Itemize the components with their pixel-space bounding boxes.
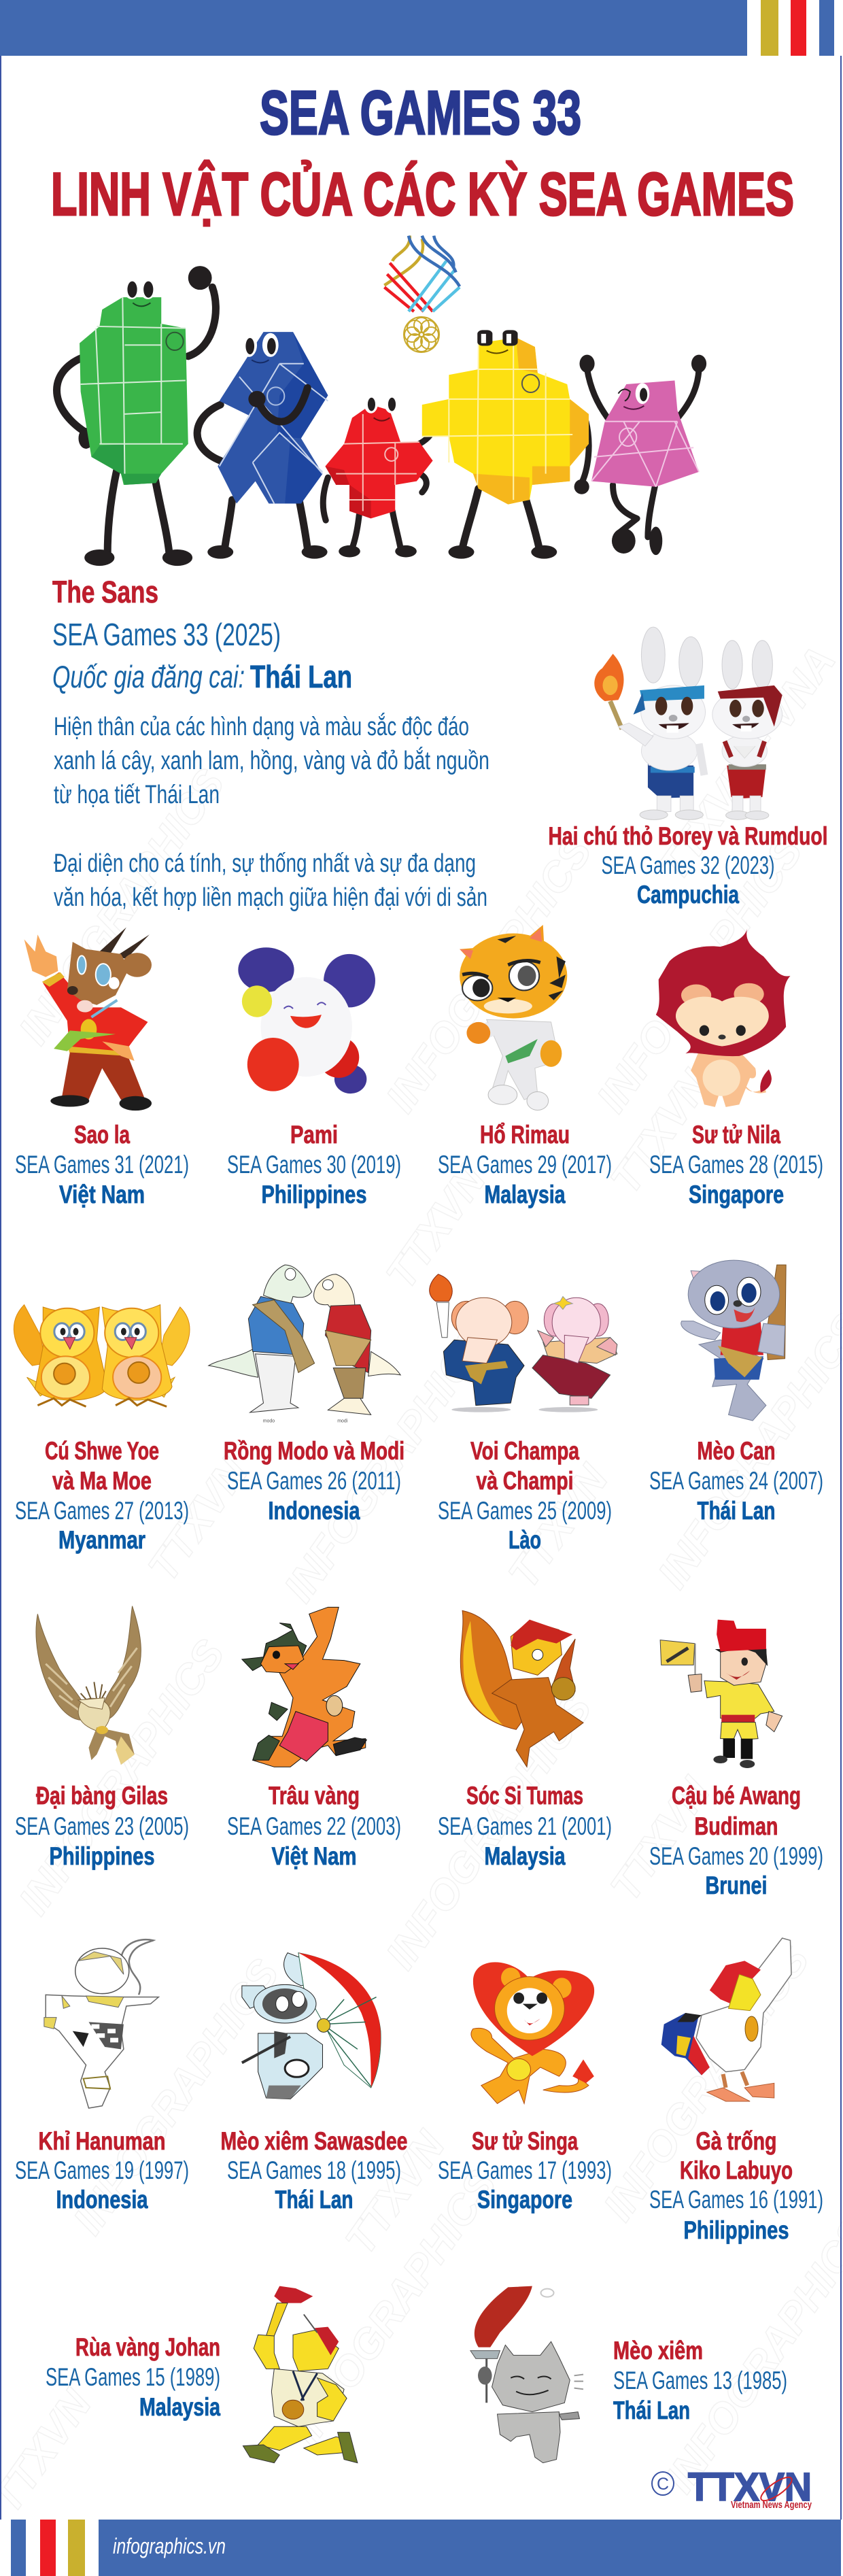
icon: Modo and Modi: modi	[337, 1419, 348, 1423]
icon: squirrel	[460, 1610, 583, 1767]
text: TTXVN	[602, 1769, 720, 1910]
icon: Hổ Rimau	[460, 925, 567, 1110]
host: Philippines	[49, 1842, 155, 1870]
icon: Sư tử Nila	[656, 928, 790, 1107]
text: INFOGRAPHICS	[377, 1686, 601, 1978]
text: TTXVN	[139, 1449, 258, 1590]
host: Singapore	[477, 2186, 572, 2214]
icon: yellow mascot	[422, 330, 589, 559]
name: Pami	[290, 1121, 338, 1149]
name: Khỉ Hanuman	[38, 2127, 166, 2155]
edition: SEA Games 18 (1995)	[227, 2156, 401, 2184]
host: Thái Lan	[275, 2186, 354, 2214]
edition: SEA Games 23 (2005)	[15, 1812, 189, 1840]
text: TTXVN – VNA	[649, 638, 843, 889]
paragraph: description: xanh lá cây, xanh lam, hồng, vàng và đỏ bắt nguồn	[54, 746, 489, 775]
icon: Sao la	[24, 928, 152, 1111]
name	[672, 1782, 801, 1840]
name: Rùa vàng Johan	[75, 2333, 220, 2361]
text: TTXVN	[377, 1157, 496, 1298]
edition: SEA Games 25 (2009)	[438, 1497, 612, 1525]
paragraph: meaning: Đại diện cho cá tính, sự thống nhất và sự đa dạng	[54, 849, 476, 878]
icon: red mascot	[323, 394, 438, 557]
title: SEA GAMES 33	[260, 79, 581, 148]
paragraph: meaning: văn hóa, kết hợp liền mạch giữa hiện đại với di sản	[54, 883, 487, 912]
edition: SEA Games 22 (2003)	[227, 1812, 401, 1840]
name: Sư tử Nila	[692, 1121, 780, 1149]
host: Singapore	[689, 1181, 784, 1208]
name: Sao la	[74, 1121, 130, 1149]
heading: The Sans: The Sans	[52, 575, 158, 609]
name: Voi Champa	[470, 1437, 579, 1465]
icon: Awang boy	[660, 1620, 782, 1768]
logo: TTXVN copyright: Vietnam News Agency	[731, 2499, 812, 2511]
host: Lào	[509, 1526, 541, 1554]
host: Philippines	[261, 1181, 367, 1208]
text: INFOGRAPHICS	[65, 1951, 288, 2243]
edition: SEA Games 19 (1997)	[15, 2156, 189, 2184]
edition: SEA Games 15 (1989)	[46, 2363, 220, 2391]
name	[45, 1437, 159, 1495]
name	[470, 1437, 579, 1495]
host: Malaysia	[484, 1842, 566, 1870]
host: Indonesia	[268, 1497, 360, 1525]
host: Myanmar	[58, 1526, 145, 1554]
paragraph: description	[54, 712, 489, 809]
card: Sao la	[15, 928, 189, 1208]
title	[51, 79, 794, 228]
edition: SEA Games 31 (2021)	[15, 1151, 189, 1179]
edition: SEA Games 33: SEA Games 33 (2025)	[52, 617, 281, 652]
icon: golden buffalo	[242, 1607, 366, 1767]
text: TTXVN	[337, 2122, 455, 2263]
edition: SEA Games 21 (2001)	[438, 1812, 612, 1840]
text: TTXVN	[602, 1062, 720, 1202]
card: Mèo xiêm	[470, 2286, 787, 2463]
icon: Siamese cat with torch	[470, 2286, 583, 2463]
logo: TTXVN copyright: TTXVN	[688, 2465, 812, 2509]
text: INFOGRAPHICS	[275, 1319, 499, 1610]
host: Việt Nam	[272, 1842, 356, 1870]
card: Sư tử Singa	[438, 1962, 612, 2214]
edition: SEA Games 29 (2017)	[438, 1151, 612, 1179]
name: Hổ Rimau	[480, 1121, 570, 1149]
name: Mèo Can	[698, 1437, 775, 1465]
name	[680, 2127, 793, 2184]
name: Trâu vàng	[269, 1782, 360, 1810]
icon: Hanuman	[44, 1939, 158, 2108]
card: Cậu bé Awang Budiman	[649, 1620, 823, 1899]
text: INFOGRAPHICS	[10, 761, 234, 1053]
name: Cậu bé Awang	[672, 1782, 801, 1810]
icon: pink mascot	[579, 355, 706, 555]
illustration: The Sans mascots	[57, 266, 706, 566]
host: Philippines	[684, 2216, 789, 2244]
name: Gà trống	[696, 2127, 776, 2155]
host: Thái Lan	[613, 2396, 690, 2424]
card: Sóc Si Tumas	[438, 1610, 612, 1870]
host: Malaysia	[139, 2393, 220, 2421]
paragraph: description: Hiện thân của các hình dạng và màu sắc độc đáo	[54, 712, 469, 741]
icon: owls	[14, 1305, 190, 1406]
card: Gà trống Kiko Labuyo	[649, 1938, 823, 2244]
host country: Quốc gia đăng cai:	[52, 659, 245, 694]
card: Sư tử Nila	[649, 928, 823, 1208]
icon: blue mascot	[197, 332, 328, 559]
host: Indonesia	[56, 2186, 148, 2214]
icon: rabbits	[594, 627, 782, 819]
name: và Ma Moe	[52, 1467, 152, 1495]
icon: SEA Games 33 logo	[384, 236, 460, 352]
card: Mèo Can	[649, 1260, 823, 1525]
name: Mèo xiêm Sawasdee	[220, 2127, 408, 2155]
card: Mèo xiêm Sawasdee	[220, 1953, 408, 2214]
card: Hổ Rimau	[438, 925, 612, 1208]
card: Đại bàng Gilas	[15, 1606, 189, 1870]
paragraph: meaning	[54, 849, 487, 912]
panel: The Sans description	[52, 575, 489, 912]
icon: elephants	[430, 1274, 617, 1412]
name: Kiko Labuyo	[680, 2156, 793, 2184]
name: Sư tử Singa	[472, 2127, 578, 2155]
icon: Modo and Modi	[209, 1265, 400, 1423]
card: Rùa vàng Johan	[46, 2286, 358, 2463]
card: Borey và Rumduol	[548, 627, 828, 909]
name: Cú Shwe Yoe	[45, 1437, 159, 1465]
card: Trâu vàng	[227, 1607, 401, 1870]
name: Đại bàng Gilas	[36, 1782, 168, 1810]
icon: Modo and Modi: modo	[263, 1419, 275, 1423]
name: Mèo xiêm	[613, 2337, 703, 2365]
top banner	[0, 0, 834, 56]
host: Campuchia	[637, 881, 739, 909]
text: INFOGRAPHICS	[595, 1937, 819, 2229]
text: TTXVN	[500, 1456, 618, 1597]
icon: golden turtle	[243, 2286, 358, 2463]
edition: SEA Games 30 (2019)	[227, 1151, 401, 1179]
name: Rồng Modo và Modi	[224, 1437, 405, 1465]
footer: website: infographics.vn	[113, 2534, 226, 2558]
host: Thái Lan	[698, 1497, 775, 1525]
text: INFOGRAPHICS	[10, 1631, 234, 1923]
host: Brunei	[706, 1871, 767, 1899]
edition: SEA Games 26 (2011)	[227, 1467, 401, 1495]
icon: green mascot	[57, 266, 216, 566]
icon: Siamese cat with umbrella	[242, 1953, 381, 2099]
card: Khỉ Hanuman	[15, 1939, 189, 2214]
paragraph: description: từ họa tiết Thái Lan	[54, 781, 220, 809]
text: INFOGRAPHICS	[588, 829, 812, 1121]
footer banner	[11, 2520, 841, 2576]
edition: SEA Games 27 (2013)	[15, 1497, 189, 1525]
icon: rooster	[661, 1938, 791, 2101]
card: Pami	[227, 947, 401, 1208]
name: Sóc Si Tumas	[466, 1782, 583, 1810]
host country: Thái Lan	[250, 659, 352, 694]
card: Rồng Modo và Modi	[209, 1265, 405, 1525]
host: Việt Nam	[59, 1181, 145, 1208]
name: Budiman	[695, 1812, 778, 1840]
edition: SEA Games 17 (1993)	[438, 2156, 612, 2184]
icon: heart lion	[471, 1962, 594, 2103]
card: Cú Shwe Yoe và Ma Moe	[14, 1305, 190, 1554]
logo: TTXVN copyright: C	[657, 2475, 669, 2494]
icon: Pami	[238, 947, 375, 1094]
icon: Mèo Can	[681, 1260, 786, 1421]
icon: eagle	[36, 1606, 141, 1765]
text: INFOGRAPHICS	[282, 2162, 506, 2454]
text: INFOGRAPHICS	[377, 829, 601, 1121]
name: và Champi	[476, 1467, 574, 1495]
card: Voi Champa và Champi	[430, 1274, 617, 1554]
host: Malaysia	[484, 1181, 566, 1208]
